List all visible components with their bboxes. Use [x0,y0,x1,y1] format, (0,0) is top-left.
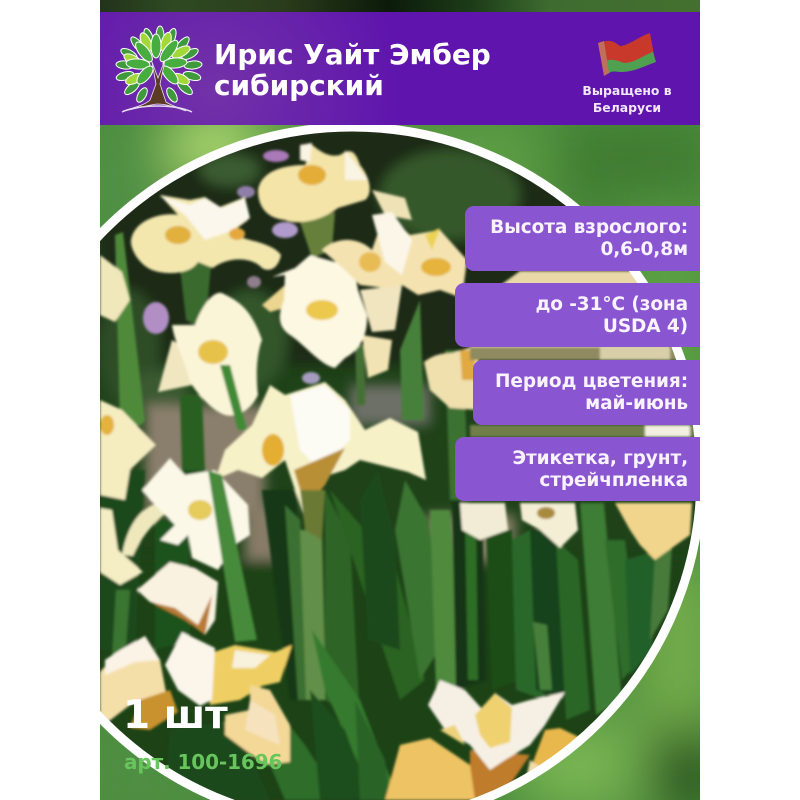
photo of white-and-yellow irises [100,125,700,800]
info box: height: 0,6-0,8м [600,239,688,260]
flower: main center [215,382,426,540]
icon: flag of Belarus [598,33,656,76]
label: grown in Belarus: Выращено в [582,83,672,98]
flower: lower left white [122,458,257,642]
out-of-focus foliage and ground [100,132,629,570]
info box: contents: Этикетка, грунт, [512,448,688,469]
cream petals and stems behind info panels [470,271,700,437]
flower: low right of center [424,345,480,410]
flower: left edge pieces [100,255,156,585]
purple background blossoms [143,150,320,384]
quantity: 1 шт [123,693,228,738]
info box: contents [455,437,700,501]
info box: height: Высота взрослого: [490,217,688,238]
title [214,38,491,102]
info box: contents: стрейчпленка [539,470,688,491]
flowers: lower right group [460,503,692,560]
flower: small lower left [137,562,218,635]
label: grown in Belarus: Беларуси [593,100,661,115]
label: grown in Belarus [582,83,672,115]
info box: flowering: Период цветения: [495,371,688,392]
header band [100,12,700,125]
flower: large bottom left [100,632,292,765]
info box: hardiness: USDA 4) [603,316,688,337]
info box: flowering [473,360,700,425]
title: Ирис Уайт Эмбер [214,38,491,71]
info box: hardiness: до -31°C (зона [535,294,688,315]
info box: flowering: май-июнь [585,393,688,414]
info box: height [465,206,700,271]
leaves [100,212,672,800]
flower: left middle [158,293,262,430]
white circular ring [100,125,700,800]
article number: арт. 100-1696 [124,750,282,774]
flower: right cluster [322,212,467,298]
flower: center [262,255,402,378]
title: сибирский [214,69,384,102]
info box: hardiness [455,283,700,347]
flower: bottom right large [385,680,585,800]
flower: upper left [131,195,281,273]
flower: top [258,143,412,222]
logo: tree [115,26,202,112]
